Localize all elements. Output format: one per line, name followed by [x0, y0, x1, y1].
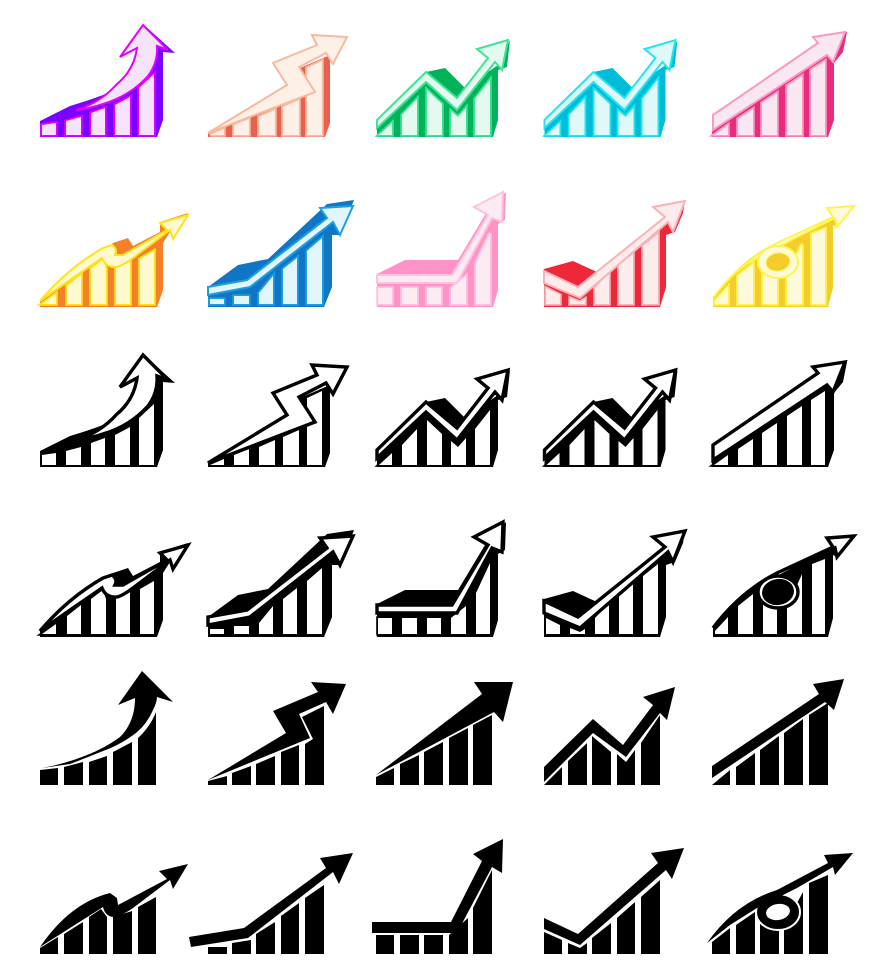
icon: solid straight growth chart	[376, 682, 513, 785]
icon: solid zigzag growth chart	[208, 682, 346, 785]
icon: outline dip growth chart	[544, 531, 685, 637]
icon: solid curved growth chart	[40, 671, 173, 785]
icon: outline peak growth chart, second	[544, 370, 678, 467]
icon: solid peak growth chart	[544, 687, 675, 785]
icon: green peak growth chart	[377, 40, 510, 137]
icon: blue plateau growth chart	[208, 200, 354, 307]
icon: light pink flat then rising chart	[377, 192, 506, 307]
icon: outline wavy growth chart	[40, 543, 188, 637]
icon: outline straight growth chart	[712, 362, 847, 467]
icon: solid wavy growth chart	[40, 864, 188, 954]
icon: solid ring growth chart	[707, 853, 853, 954]
icon: outline peak growth chart	[377, 370, 510, 467]
icon: solid dip growth chart	[544, 848, 684, 954]
icon: coral zigzag growth chart	[208, 35, 347, 137]
icon: outline flat then rising chart	[377, 522, 506, 637]
icon: solid flat then rising chart	[372, 839, 503, 954]
icon: outline ring growth chart	[713, 536, 854, 637]
icon: magenta straight growth chart	[712, 32, 847, 137]
icon: red dip growth chart	[544, 201, 685, 307]
icon: outline zigzag growth chart	[208, 365, 347, 467]
icon: solid banded growth chart	[712, 679, 844, 785]
icon: outline plateau growth chart	[208, 530, 354, 637]
icon: outline curved growth chart	[40, 354, 175, 467]
icon: orange wavy growth chart	[40, 213, 188, 307]
icon: purple curved growth chart	[40, 24, 175, 137]
icon: solid tilted plateau growth chart	[189, 853, 353, 954]
icon: cyan peak growth chart	[544, 40, 678, 137]
icon: yellow ring growth chart	[713, 206, 854, 307]
